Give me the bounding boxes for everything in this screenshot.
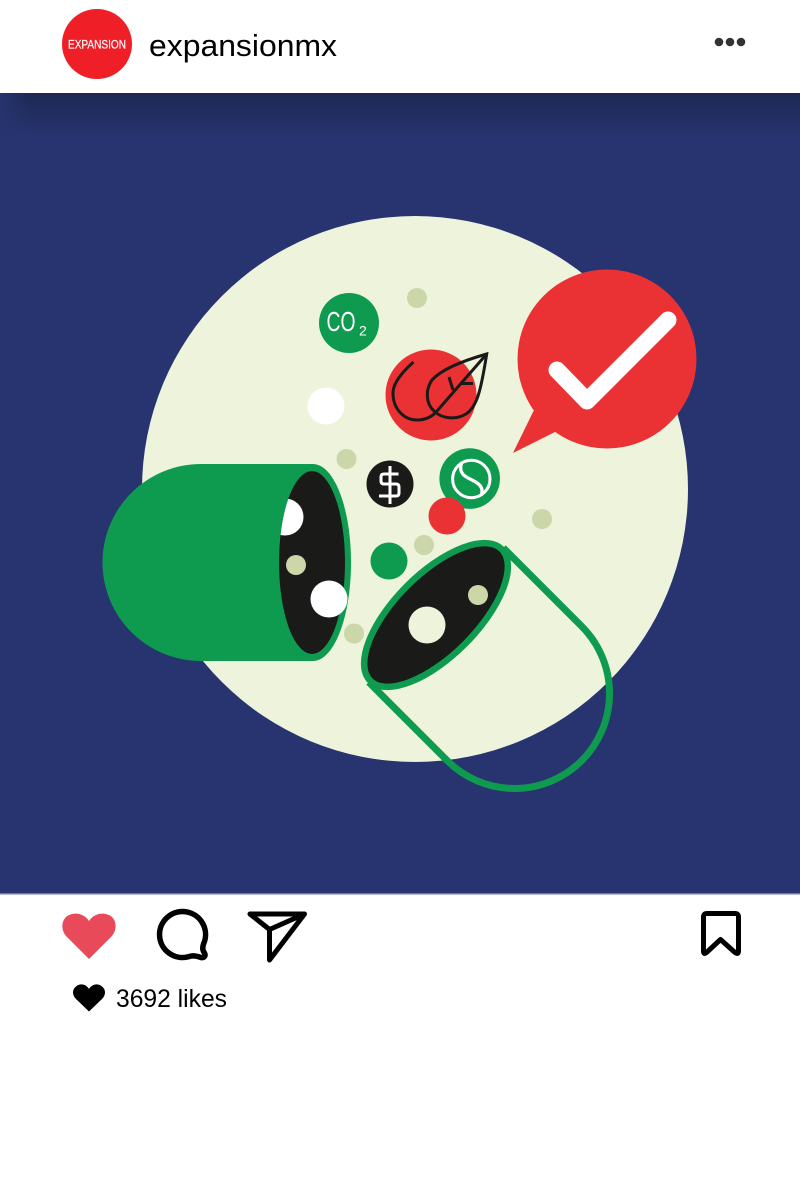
icon: black heart (73, 984, 105, 1012)
illustration panel (0, 93, 800, 894)
navy background (0, 93, 800, 894)
speech bubble with check mark (513, 270, 696, 453)
logo: Expansion: EXPANSION (68, 38, 126, 52)
icon: dollar (366, 460, 414, 508)
pills inside outlined capsule (408, 585, 488, 644)
icon: comment (160, 912, 206, 958)
top shadow (8, 93, 800, 123)
logo: Expansion (62, 9, 132, 79)
cream circle (142, 216, 688, 762)
pills inside green capsule (280, 498, 348, 618)
header bar (62, 9, 745, 79)
icon: bookmark (704, 914, 738, 953)
icon: CO2: CO (326, 306, 356, 337)
icon: more menu (715, 38, 745, 46)
outlined open capsule (341, 520, 610, 789)
red dot (428, 498, 466, 534)
account name: expansionmx (149, 28, 338, 63)
green open capsule (102, 464, 351, 661)
action bar (62, 912, 739, 1013)
likes text: 3692 likes (116, 985, 227, 1013)
icon: CO2: 2 (359, 322, 367, 338)
floating dots (308, 288, 552, 644)
icon: leaf (386, 350, 487, 440)
bottom edge line (0, 893, 800, 894)
icon: CO2 (319, 293, 379, 353)
likes count (73, 984, 227, 1013)
icon: red heart (62, 914, 116, 959)
icon: recycle swirl (439, 448, 500, 509)
icon: send (250, 914, 304, 960)
